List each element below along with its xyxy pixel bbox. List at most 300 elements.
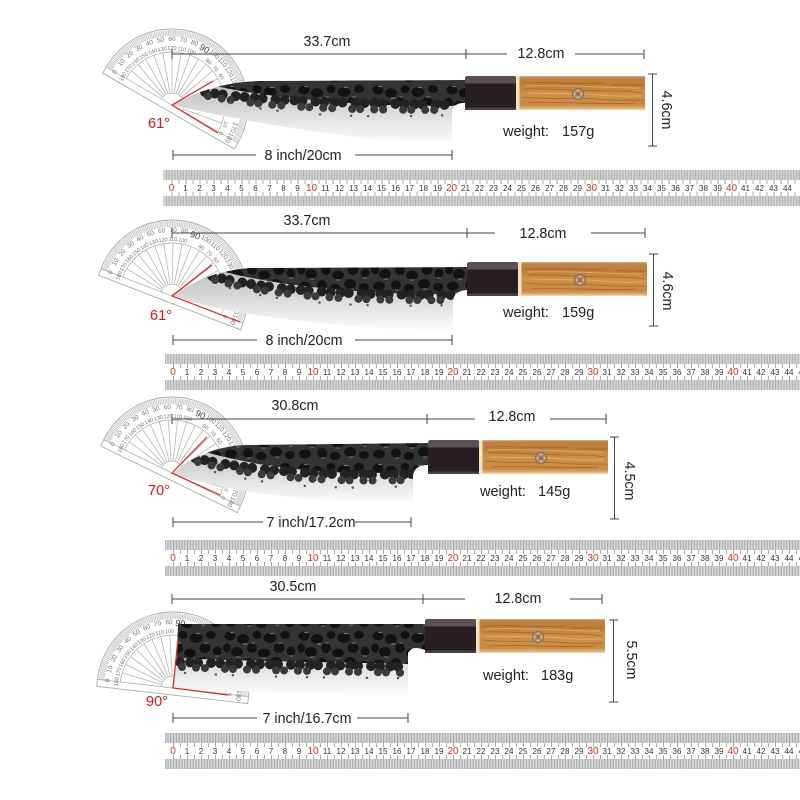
dimensions knife 3 [172,398,637,531]
ruler 2: 41 [743,368,752,377]
angle marker 4: 90° [146,694,168,710]
protractor 2: 150 [131,247,142,258]
protractor 3: 10 [114,429,124,439]
ruler 2: 11 [323,368,332,377]
dimensions knife 2: 12.8cm [520,226,566,242]
ruler 3: 1 [185,554,190,563]
protractor 3: 140 [144,417,155,426]
knife 3 [172,440,608,503]
angle marker 1: 61° [148,116,170,132]
ruler 1: 23 [489,184,498,193]
protractor 1: 10 [117,58,127,68]
ruler 1: 31 [601,184,610,193]
protractor 3: 130 [226,440,237,453]
ruler 1: 0 [169,183,175,194]
ruler 3: 42 [757,554,766,563]
protractor 2: 140 [139,242,150,252]
ruler 4: 3 [213,747,218,756]
ruler 2: 43 [771,368,780,377]
ruler 4: 22 [477,747,486,756]
protractor 3: 100 [182,415,193,423]
protractor 3: 60 [164,404,172,411]
ruler 4: 0 [170,746,176,757]
ruler 2: 40 [727,367,739,378]
ruler 1: 24 [503,184,512,193]
protractor 1: 60 [216,73,225,81]
protractor 3: 20 [121,421,132,431]
dimensions knife 3: 30.8cm [272,398,318,414]
ruler 3: 14 [365,554,374,563]
ruler 1: 5 [239,184,244,193]
ruler 4: 43 [771,747,780,756]
protractor 1: 50 [156,36,165,45]
protractor 1: 170 [228,121,239,134]
ruler 1: 39 [713,184,722,193]
ruler 2: 21 [463,368,472,377]
knife 2 [172,262,647,330]
dimensions knife 4: 7 inch/16.7cm [262,711,352,727]
ruler 4: 11 [323,747,332,756]
protractor 1: 40 [145,39,155,48]
protractor 4: 50 [132,628,142,638]
dimensions knife 2: 159g [562,305,594,321]
protractor 1: 130 [157,46,167,54]
ruler 1: 21 [461,184,470,193]
ruler 1: 4 [225,184,230,193]
ruler 2: 35 [659,368,668,377]
protractor 1: 70 [211,65,219,73]
ruler 2: 30 [587,367,599,378]
ruler 4: 10 [307,746,319,757]
ruler 3: 3 [213,554,218,563]
protractor 3: 120 [220,430,232,443]
protractor 3: 130 [153,415,164,423]
protractor 1: 80 [190,39,199,48]
ruler 3: 12 [337,554,346,563]
protractor 3: 70 [208,430,217,438]
protractor 4: 160 [118,658,128,668]
ruler 2: 1 [185,368,190,377]
ruler 3: 40 [727,553,739,564]
ruler 4: 13 [351,747,360,756]
ruler 1: 3 [211,184,216,193]
ruler 3: 41 [743,554,752,563]
ruler 1: 15 [377,184,386,193]
ruler 3: 26 [533,554,542,563]
ruler 4: 30 [587,746,599,757]
angle marker 2: 61° [150,308,172,324]
ruler 4: 2 [199,747,204,756]
ruler 2: 26 [533,368,542,377]
protractor 3: 170 [122,435,132,446]
protractor 1: 70 [179,36,188,45]
protractor 2: 90 [189,229,202,242]
ruler 3: 4 [227,554,232,563]
ruler 4: 33 [631,747,640,756]
ruler 4: 32 [617,747,626,756]
protractor 4: 30 [115,644,126,654]
protractor 4: 140 [129,642,140,653]
dimensions knife 1: 157g [562,124,594,140]
protractor 2: 70 [204,249,213,258]
protractor 4: 10 [106,665,115,674]
protractor 4: 100 [165,629,174,635]
ruler 2: 24 [505,368,514,377]
ruler 3: 27 [547,554,556,563]
ruler 4: 12 [337,747,346,756]
ruler 2: 34 [645,368,654,377]
ruler 1: 37 [685,184,694,193]
ruler 1: 34 [643,184,652,193]
protractor 4 [97,604,257,704]
dimensions knife 2: 4.6cm [659,272,675,310]
ruler 4: 6 [255,747,260,756]
ruler 3: 18 [421,554,430,563]
ruler 1: 35 [657,184,666,193]
protractor 4: 170 [235,678,242,690]
ruler 1: 6 [253,184,258,193]
ruler 2: 10 [307,367,319,378]
ruler 2: 31 [603,368,612,377]
ruler 2: 39 [715,368,724,377]
protractor 1: 100 [186,48,196,57]
knife 4 [173,619,605,696]
ruler 2: 12 [337,368,346,377]
protractor 4: 90 [175,618,186,629]
ruler 3: 38 [701,554,710,563]
ruler 2: 17 [407,368,416,377]
ruler 2: 27 [547,368,556,377]
ruler 4: 16 [393,747,402,756]
ruler 4: 29 [575,747,584,756]
protractor 3: 40 [141,408,150,418]
ruler 4: 41 [743,747,752,756]
ruler 4: 7 [269,747,274,756]
protractor 3: 110 [213,421,225,434]
ruler 3: 5 [241,554,246,563]
ruler 3: 2 [199,554,204,563]
ruler 1: 18 [419,184,428,193]
protractor 3: 170 [230,485,240,498]
ruler 1: 11 [321,184,330,193]
protractor 2: 50 [146,229,156,239]
ruler 2: 38 [701,368,710,377]
protractor 1: 130 [228,76,239,89]
dimensions knife 4: 5.5cm [623,641,639,679]
ruler 4: 23 [491,747,500,756]
protractor 2: 130 [224,258,235,271]
ruler 1: 8 [281,184,286,193]
protractor 3: 50 [152,405,161,414]
ruler 4: 5 [241,747,246,756]
angle marker 1 [148,81,218,133]
protractor 3: 110 [173,414,183,421]
ruler 2: 19 [435,368,444,377]
ruler 4: 37 [687,747,696,756]
ruler 1: 29 [573,184,582,193]
ruler 1: 22 [475,184,484,193]
protractor 2: 160 [124,254,135,265]
ruler 3: 21 [463,554,472,563]
protractor 1: 180 [223,131,234,145]
ruler 3: 0 [170,553,176,564]
dimensions knife 4: 30.5cm [270,579,316,595]
protractor 4: 60 [142,623,152,633]
protractor 3: 0 [219,495,226,500]
ruler 1: 12 [335,184,344,193]
ruler 4: 31 [603,747,612,756]
ruler 2 [165,354,800,390]
protractor 2: 80 [180,228,189,236]
ruler 2: 13 [351,368,360,377]
ruler 1: 36 [671,184,680,193]
ruler 2: 25 [519,368,528,377]
ruler 4: 9 [297,747,302,756]
dimensions knife 1: weight: [502,124,549,140]
protractor 3: 150 [135,422,146,432]
protractor 4: 20 [110,654,119,664]
ruler 4: 17 [407,747,416,756]
protractor 4: 120 [145,632,156,641]
ruler 1: 33 [629,184,638,193]
ruler 1: 13 [349,184,358,193]
protractor 1: 140 [148,48,158,57]
protractor 4: 40 [123,635,133,646]
ruler 2: 9 [297,368,302,377]
ruler 3: 6 [255,554,260,563]
ruler 2: 3 [213,368,218,377]
protractor 2: 10 [223,303,231,310]
protractor 4: 70 [153,620,162,629]
protractor 1: 110 [216,57,228,69]
ruler 2: 44 [785,368,794,377]
ruler 3: 11 [323,554,332,563]
protractor 1: 170 [124,64,134,74]
ruler 4: 4 [227,747,232,756]
ruler 2: 18 [421,368,430,377]
ruler 3: 44 [785,554,794,563]
ruler 1: 2 [197,184,202,193]
protractor 1: 180 [119,72,128,82]
protractor 1: 120 [223,66,235,79]
dimensions knife 4: weight: [482,668,529,684]
ruler 3: 10 [307,553,319,564]
ruler 2: 16 [393,368,402,377]
ruler 4: 19 [435,747,444,756]
dimensions knife 3: 7 inch/17.2cm [266,515,356,531]
ruler 1: 40 [726,183,737,194]
ruler 3: 17 [407,554,416,563]
protractor 2: 60 [211,256,220,265]
protractor 3 [101,371,274,513]
ruler 1: 7 [267,184,272,193]
protractor 2: 170 [232,303,241,315]
protractor 4: 170 [115,667,123,677]
protractor 3: 10 [222,485,230,492]
ruler 4: 36 [673,747,682,756]
protractor 4: 0 [225,692,232,696]
ruler 2: 42 [757,368,766,377]
protractor 1: 60 [168,36,176,43]
protractor 2: 0 [107,269,115,275]
protractor 4: 80 [165,619,173,626]
ruler 1: 44 [783,184,792,193]
ruler 4: 14 [365,747,374,756]
protractor 1: 100 [208,49,221,61]
ruler 3: 30 [587,553,599,564]
protractor 2: 70 [169,227,177,234]
protractor 4: 180 [234,690,242,702]
ruler 1: 38 [699,184,708,193]
ruler 3: 32 [617,554,626,563]
ruler 1: 41 [741,184,750,193]
protractor 4: 10 [226,681,232,688]
dimensions knife 2: weight: [502,305,549,321]
ruler 1: 28 [559,184,568,193]
ruler 1: 26 [531,184,540,193]
protractor 4: 150 [123,649,133,660]
protractor 1: 110 [177,46,187,54]
ruler 1: 16 [391,184,400,193]
ruler 4: 27 [547,747,556,756]
ruler 2: 0 [170,367,176,378]
ruler 3: 23 [491,554,500,563]
protractor 2: 100 [178,237,188,245]
protractor 3: 100 [204,414,217,426]
angle marker 2 [150,265,240,324]
ruler 4: 42 [757,747,766,756]
ruler 3: 16 [393,554,402,563]
ruler 2: 6 [255,368,260,377]
ruler 3 [165,540,800,576]
ruler 1: 9 [295,184,300,193]
angle marker 3 [148,437,220,499]
ruler 3: 9 [297,554,302,563]
protractor 3: 80 [186,406,195,415]
protractor 2: 80 [197,244,205,252]
dimensions knife 3: 4.5cm [621,462,637,500]
protractor 2: 110 [169,237,177,243]
dimensions knife 4: 183g [541,668,573,684]
protractor 2: 180 [228,313,238,326]
dimensions knife 2 [172,213,675,349]
dimensions knife 3: 12.8cm [489,409,535,425]
ruler 4: 25 [519,747,528,756]
protractor 2: 40 [135,234,145,244]
ruler 1: 43 [769,184,778,193]
protractor 2: 130 [148,239,159,247]
ruler 3: 29 [575,554,584,563]
protractor 1: 120 [167,46,177,52]
ruler 4: 28 [561,747,570,756]
ruler 1: 19 [433,184,442,193]
ruler 2: 4 [227,368,232,377]
ruler 3: 28 [561,554,570,563]
protractor 2: 110 [209,241,221,253]
ruler 1: 27 [545,184,554,193]
protractor 3: 70 [175,404,183,412]
protractor 3: 30 [130,414,141,424]
ruler 2: 8 [283,368,288,377]
protractor 1: 30 [134,43,144,53]
ruler 4: 38 [701,747,710,756]
protractor 1: 90 [198,42,211,56]
ruler 3: 19 [435,554,444,563]
ruler 2: 23 [491,368,500,377]
ruler 1: 42 [755,184,764,193]
ruler 4: 26 [533,747,542,756]
protractor 1: 150 [139,52,149,61]
protractor 3: 0 [109,441,117,447]
ruler 2: 22 [477,368,486,377]
ruler 1: 20 [446,183,457,194]
dimensions knife 4 [172,579,639,727]
ruler 4: 40 [727,746,739,757]
ruler 2: 15 [379,368,388,377]
knife 1 [172,76,645,143]
ruler 1 [164,170,800,206]
ruler 3: 36 [673,554,682,563]
ruler 2: 29 [575,368,584,377]
ruler 1: 1 [183,184,188,193]
ruler 3: 39 [715,554,724,563]
ruler 2: 28 [561,368,570,377]
protractor 2 [99,198,270,330]
ruler 4: 39 [715,747,724,756]
ruler 3: 43 [771,554,780,563]
protractor 3: 180 [225,495,236,508]
ruler 3: 8 [283,554,288,563]
protractor 2: 60 [158,227,166,235]
ruler 4: 35 [659,747,668,756]
protractor 2: 30 [126,240,136,250]
ruler 4: 8 [283,747,288,756]
dimensions knife 2: 33.7cm [284,213,330,229]
ruler 2: 37 [687,368,696,377]
protractor 4: 130 [137,636,148,646]
ruler 2: 32 [617,368,626,377]
protractor 3: 160 [128,427,138,438]
ruler 3: 13 [351,554,360,563]
dimensions knife 3: weight: [479,484,526,500]
protractor 2: 0 [221,314,228,319]
protractor 1: 20 [125,50,135,60]
ruler 4: 34 [645,747,654,756]
protractor 2: 120 [158,237,168,244]
dimensions knife 1: 8 inch/20cm [264,148,342,164]
ruler 3: 25 [519,554,528,563]
dimensions knife 1 [172,34,674,164]
ruler 3: 22 [477,554,486,563]
protractor 4: 110 [155,630,165,637]
protractor 1: 10 [221,120,228,128]
ruler 4: 21 [463,747,472,756]
protractor 2: 180 [115,271,124,281]
ruler 4: 15 [379,747,388,756]
ruler 1: 25 [517,184,526,193]
ruler 2: 33 [631,368,640,377]
protractor 3: 180 [117,443,126,454]
ruler 3: 33 [631,554,640,563]
ruler 3: 24 [505,554,514,563]
ruler 2: 5 [241,368,246,377]
ruler 4: 18 [421,747,430,756]
dimensions knife 4: 12.8cm [495,591,541,607]
ruler 2: 36 [673,368,682,377]
ruler 3: 15 [379,554,388,563]
protractor 1: 80 [204,58,212,66]
ruler 2: 14 [365,368,374,377]
